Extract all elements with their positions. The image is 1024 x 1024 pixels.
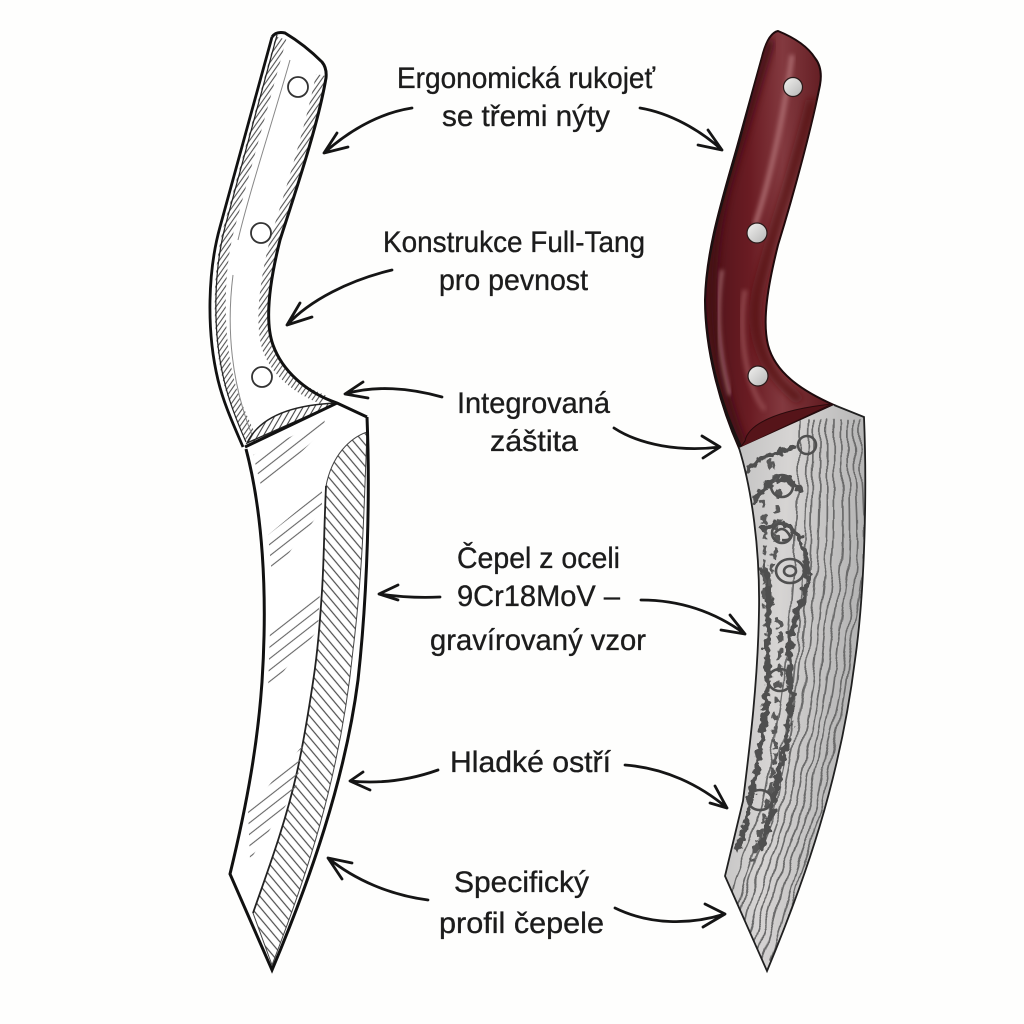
coloured guard: [740, 404, 832, 448]
arrow: profile right: [615, 904, 725, 927]
label: blade steel: gravírovaný vzor: [430, 624, 646, 657]
label: blade steel: Čepel z oceli: [457, 541, 620, 575]
line-art rivet 1: [288, 77, 308, 97]
label: ergonomic handle: [397, 62, 656, 133]
line-art knife: [210, 32, 368, 970]
label: full tang: pro pevnost: [439, 264, 589, 297]
coloured rivet 3: [748, 366, 768, 386]
label: full tang: [383, 226, 645, 297]
arrow: handle right: [640, 108, 722, 150]
label: blade steel: 9Cr18MoV –: [457, 580, 620, 613]
line-art guard: [247, 403, 337, 443]
arrow: handle left: [324, 108, 412, 153]
arrow: profile left: [328, 858, 428, 900]
arrow: guard left: [345, 382, 442, 398]
coloured rivet 1: [784, 78, 802, 96]
label: ergonomic handle: se třemi nýty: [442, 100, 610, 133]
label: blade profile: Specifický: [454, 866, 589, 899]
label: integrated guard: Integrovaná: [457, 387, 610, 420]
coloured knife: [702, 31, 865, 971]
damascus dark blobby band: [738, 445, 808, 850]
arrow: tang left: [287, 270, 392, 325]
line-art rivet 2: [251, 223, 271, 243]
damascus thin layer lines: [732, 418, 864, 961]
damascus blade: [712, 405, 865, 971]
coloured handle: [702, 31, 834, 449]
label: smooth edge: Hladké ostří: [450, 746, 612, 779]
arrow: edge right: [625, 765, 727, 808]
arrow: blade left: [379, 585, 440, 600]
label: full tang: Konstrukce Full-Tang: [383, 226, 645, 259]
arrow: edge left: [350, 770, 438, 790]
label: integrated guard: [457, 387, 610, 458]
damascus swirls: [748, 436, 816, 810]
arrow: blade right: [641, 600, 745, 634]
label: blade profile: profil čepele: [439, 907, 604, 940]
line-art handle: [210, 32, 367, 447]
coloured rivet 2: [747, 223, 767, 243]
line-art rivet 3: [252, 367, 272, 387]
label: blade profile: [439, 866, 604, 940]
arrow: guard right: [614, 428, 720, 458]
line-art blade: [230, 403, 368, 970]
label: blade steel: [430, 541, 646, 657]
label: integrated guard: záštita: [490, 425, 578, 458]
label: ergonomic handle: Ergonomická rukojeť: [397, 62, 656, 95]
